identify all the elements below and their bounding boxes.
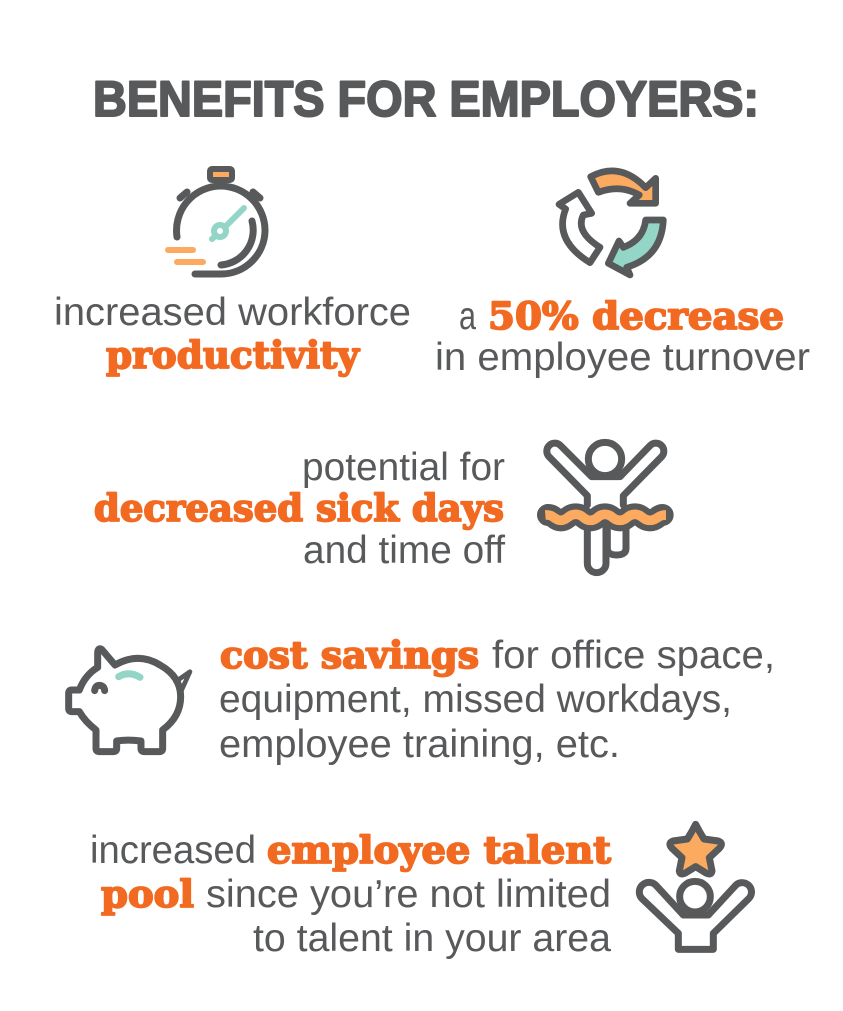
text: cost savings: equipment, missed workdays,	[219, 678, 732, 721]
text: increased employee talent pool: employee talent	[267, 828, 611, 872]
icon: stopwatch	[168, 169, 265, 274]
text: 50% decrease in employee turnover: in employee turnover	[435, 336, 810, 379]
text: cost savings: cost savings	[220, 633, 479, 677]
icon: person reaching for star	[639, 824, 751, 949]
title: BENEFITS FOR EMPLOYERS:	[93, 71, 759, 127]
text: 50% decrease in employee turnover: 50% decrease	[488, 294, 784, 338]
text: increased employee talent pool: since you’re not limited	[206, 873, 611, 916]
icon: person crossing finish line	[545, 442, 666, 573]
text: 50% decrease in employee turnover: a	[459, 295, 476, 338]
text: increased employee talent pool: to talent in your area	[253, 917, 611, 960]
icon: recycling arrows	[559, 171, 663, 275]
text: increased workforce productivity: increased workforce	[54, 291, 411, 334]
text: potential for decreased sick days and time off: potential for	[302, 446, 505, 489]
text: 50% decrease in employee turnover	[435, 294, 810, 379]
text: cost savings: employee training, etc.	[219, 723, 620, 766]
icon: piggy bank	[69, 649, 190, 752]
text: increased workforce productivity	[54, 291, 411, 377]
text: potential for decreased sick days and time off: and time off	[303, 529, 505, 572]
text: increased employee talent pool: pool	[101, 872, 194, 916]
text: increased employee talent pool: increased	[90, 829, 256, 872]
text: increased employee talent pool	[90, 828, 611, 960]
text: cost savings	[219, 633, 775, 766]
text: potential for decreased sick days and time off	[94, 446, 505, 572]
text: cost savings: for office space,	[492, 634, 775, 677]
text: potential for decreased sick days and time off: decreased sick days	[94, 486, 504, 530]
text: increased workforce productivity: productivity	[106, 333, 361, 377]
